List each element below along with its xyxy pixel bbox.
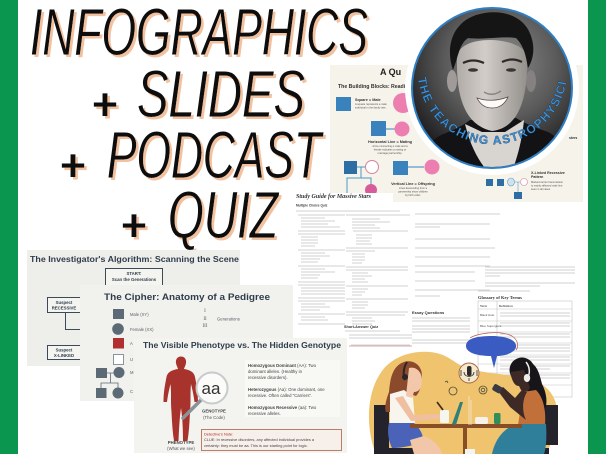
symbol: x-linked recessive example [486,178,528,199]
legend: affected: A [130,341,133,346]
symbol: vertical line offspring: Vertical Line = Offspring [391,182,436,186]
symbol: square male: A square represents a male [355,102,387,106]
title: infographics + slides + podcast + quiz: + [121,199,147,251]
connector arrow [66,312,82,330]
x-linked recessive caption: seen in all cases [531,187,551,191]
speech bubble [466,333,518,368]
legend: unaffected [114,354,133,364]
slide heading: The Cipher: Anatomy of a Pedigree [104,292,270,303]
start box [106,268,162,286]
genotype definitions: recessive disorders). [248,375,288,380]
x-linked recessive caption: X-Linked Recessive [531,171,565,175]
title: infographics + slides + podcast + quiz: PODCAST [107,118,324,193]
woman right [492,358,546,454]
chairs [374,405,558,454]
woman left [385,361,449,454]
suspect x-linked box [48,346,82,360]
symbol: horizontal line mating: marriage partnership. [378,151,403,155]
icon: magnifying glass with aa [183,372,228,418]
symbol: horizontal line mating: A line connecting a male and a [372,144,408,148]
callout: detective's note [202,430,342,450]
legend: affected [113,338,133,348]
right green border [588,0,606,454]
legend: male: Male (XY) [130,312,149,317]
multiple choice heading: Multiple Choice Quiz [296,204,328,208]
genotype definitions: dominant alleles. (Healthy in [248,369,303,374]
slide heading: The Visible Phenotype vs. The Hidden Genotype [143,341,342,350]
glossary column headers: Definition [499,304,513,308]
legend: female: Female (XX) [130,327,154,332]
icon: magnifying glass with aa: aa [202,379,221,398]
glossary heading: Glossary of Key Terms [478,295,522,300]
microphone badge [459,363,479,383]
short answer heading: Short-Answer Quiz [344,325,378,329]
symbol: horizontal line mating [368,121,413,155]
panel: study guide document [293,193,588,454]
suspect x-linked box: Suspect [56,348,73,352]
panel: pedigree building blocks slide [330,65,583,202]
genotype label: (The Code) [203,415,225,420]
suspect x-linked box: X-LINKED [54,353,74,358]
generations key [202,309,240,329]
portrait photo [410,5,575,172]
legend: mating and children: M [130,370,134,375]
x-linked recessive caption: to mainly affected male line [531,184,563,188]
slide subheading: The Building Blocks: Reading I [338,84,415,90]
genotype definitions: Heterozygous (Aa): One dominant, one [248,387,325,392]
panel: cipher anatomy of a pedigree slide [80,285,293,401]
x-linked recessive caption: Pattern [531,175,543,179]
icon: red human figure [164,356,198,441]
glossary table [478,301,572,397]
symbol: square male: individual in the family tree. [355,106,387,110]
panel: visible phenotype vs hidden genotype slide [134,338,347,453]
slide title: A Qu [380,67,401,77]
x-linked recessive caption: Marked carrier transmission [531,180,564,184]
symbol: vertical line offspring: by birth order. [405,193,421,197]
glossary column headers: Term [480,304,487,308]
start box: START: [127,271,142,276]
suspect recessive box [48,298,82,312]
document title: Study Guide for Massive Stars [296,194,372,200]
start box: Scan the Generations [112,277,157,282]
legend: female [112,323,154,335]
genotype label [202,408,226,420]
symbol: square male: Square = Male [355,98,381,102]
portrait badge: the teaching astrophysicist [405,7,579,175]
left green border [0,0,18,454]
symbol: vertical line offspring: Lines descending from a [399,186,428,190]
title: infographics + slides + podcast + quiz: + [60,139,86,191]
symbol: horizontal line mating: Horizontal Line = Mating [368,140,413,144]
phenotype label [167,440,195,451]
x-linked recessive caption [531,171,565,191]
callout: detective's note: Detective's Note: [204,432,233,436]
suspect recessive box: RECESSIVE [52,306,76,310]
symbol: vertical line offspring: partnership show children [398,190,428,194]
symbol: horizontal line mating: female indicates a mating or [374,148,406,152]
badge ring lettering [418,78,567,144]
glossary column headers: Black Hole [480,313,495,317]
generations key: I [204,309,206,314]
callout: detective's note: CLUE: In recessive disorders, any affected individual provides a [204,437,315,442]
genotype label: GENOTYPE [202,408,226,414]
symbol: vertical line offspring [391,160,440,197]
genotype definitions: recessive. Often called "Carriers". [248,393,312,398]
essay questions heading: Essay Questions [412,310,445,315]
title: infographics + slides + podcast + quiz: QUIZ [168,178,279,253]
generations key: III [202,324,208,329]
title: infographics + slides + podcast + quiz: + [92,78,118,130]
phenotype label: (What we see) [167,446,195,451]
title: infographics + slides + podcast + quiz [30,0,368,253]
legend: mating and children: C [130,389,133,394]
illustration: two women recording a podcast [369,333,558,454]
genotype definitions: Homozygous Dominant (AA): Two [248,363,317,368]
phenotype label: PHENOTYPE [168,440,194,445]
glossary column headers [480,304,513,328]
legend: mating and children [96,367,134,398]
slide heading: The Investigator's Algorithm: Scanning the Scene [30,254,239,264]
yellow blob background [369,352,557,454]
glossary column headers: Blue Supergiant [480,324,502,328]
callout: detective's note: certainty: they must be aa. This is our starting point for logic. [204,443,308,448]
table with tablet, bowl and bottle [410,396,522,454]
generations key: Generations [217,316,240,322]
symbol: family tree [344,160,378,196]
right edge note: sters [569,136,577,140]
legend: unaffected: U [130,357,133,362]
generations key: II [203,317,207,322]
quiz text columns [296,211,575,378]
legend: male [113,309,149,319]
genotype definitions: Homozygous Recessive (aa): Two [248,405,317,410]
red underlined note [349,345,412,347]
suspect recessive box: Suspect [56,300,73,305]
symbol: square male [336,93,413,113]
genotype definitions [245,360,340,417]
genotype definitions: recessive alleles. [248,411,281,416]
small floating icons [445,381,487,395]
panel: investigator's algorithm slide [27,250,240,366]
title: infographics + slides + podcast + quiz: SLIDES [137,57,305,132]
